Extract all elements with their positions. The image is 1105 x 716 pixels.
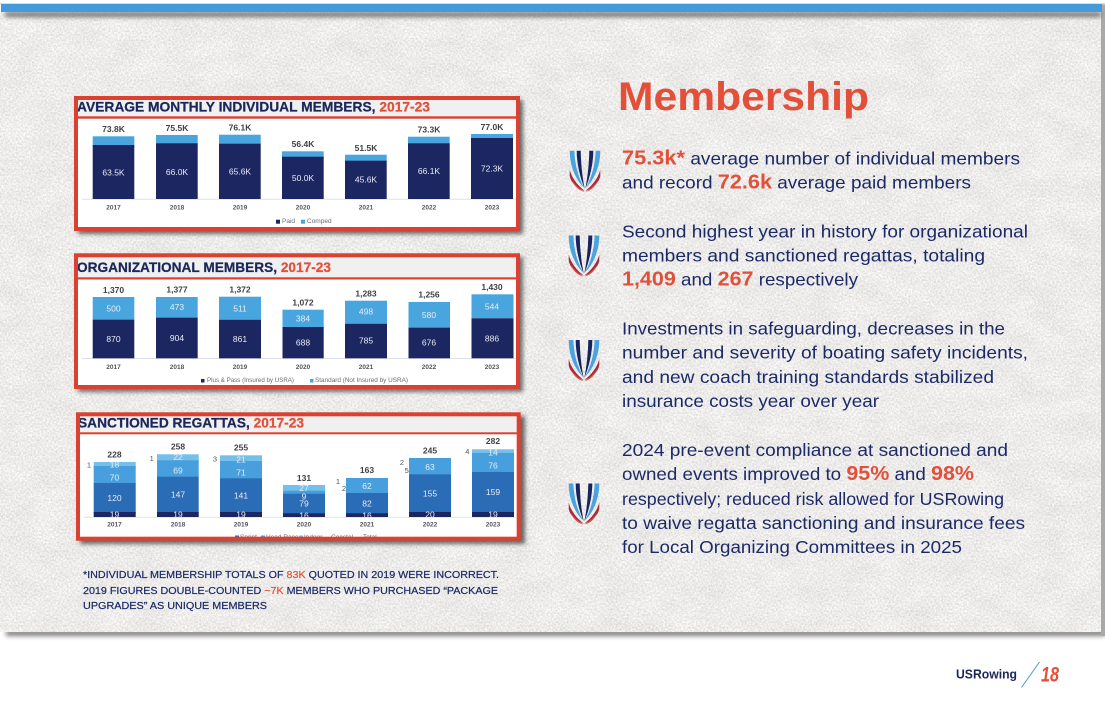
stacked bar chart: regattas: 2021 <box>360 522 375 528</box>
stacked bar chart: regattas <box>84 436 516 541</box>
bar chart: individual members: 76.1K <box>229 123 252 133</box>
bar chart: organizational members: 2020 <box>296 364 311 371</box>
stacked bar chart: regattas: 69 <box>173 466 183 476</box>
bar chart: individual members: 75.5K <box>166 123 189 133</box>
bar chart: organizational members: 870 <box>106 334 121 344</box>
bar chart: organizational members: 1,377 <box>166 285 188 295</box>
bar chart: organizational members: 785 <box>359 336 373 346</box>
bar chart: organizational members: 580 <box>422 310 436 320</box>
stacked bar chart: regattas: 70 <box>110 473 119 483</box>
text block: compliance: to waive regatta sanctioning and insurance fees <box>622 513 1025 533</box>
text block: compliance: owned events improved to 95% and 98% <box>622 463 974 485</box>
icon: oars 1 <box>570 151 600 192</box>
stacked bar chart: regattas: 82 <box>362 498 372 508</box>
text block: individual members <box>622 148 1020 194</box>
bar chart: organizational members <box>82 282 516 384</box>
legend: Sprint <box>240 534 257 541</box>
text block: compliance: respectively; reduced risk allowed for USRowing <box>622 489 1004 509</box>
bar chart: individual members: 2018 <box>170 204 185 212</box>
stacked bar chart: regattas: 20 <box>425 510 435 520</box>
bar chart: organizational members: 2023 <box>485 364 500 371</box>
bar chart: individual members: 66.1K <box>418 166 440 176</box>
bar chart: organizational members: 384 <box>296 314 310 324</box>
stacked bar chart: regattas: 2017 <box>107 522 122 528</box>
legend: Plus & Pass (Insured by USRA) <box>207 377 294 384</box>
stacked bar chart: regattas: 159 <box>486 487 500 497</box>
stacked bar chart: regattas: 228 <box>107 449 122 459</box>
stacked bar chart: regattas: 255 <box>234 443 248 453</box>
bar chart: individual members: 56.4K <box>292 139 315 149</box>
bar chart: individual members: 2019 <box>233 204 248 212</box>
footnote: *INDIVIDUAL MEMBERSHIP TOTALS OF 83K QUOTED IN 2019 WERE INCORRECT. <box>83 570 499 581</box>
stacked bar chart: regattas: 141 <box>234 491 248 501</box>
stacked bar chart: regattas: 19 <box>236 510 246 520</box>
bar chart: organizational members: 500 <box>106 303 121 313</box>
bar chart: individual members: 77.0K <box>481 122 504 132</box>
bar chart: organizational members: 1,372 <box>229 285 251 295</box>
bar chart: individual members <box>82 122 516 225</box>
icon: oars 4 <box>569 484 599 524</box>
stacked bar chart: regattas: 79 <box>299 499 309 509</box>
bar chart: individual members: 2017 <box>106 204 121 212</box>
stacked bar chart: regattas: 4 <box>465 447 469 456</box>
bar chart: organizational members: 904 <box>170 333 184 343</box>
stacked bar chart: regattas: 2020 <box>297 522 312 528</box>
bar chart: organizational members: 1,370 <box>103 285 124 295</box>
stacked bar chart: regattas: 9 <box>302 491 307 501</box>
text block: safeguarding: insurance costs year over year <box>622 391 879 411</box>
text block: organizational members: members and sanctioned regattas, totaling <box>622 246 985 266</box>
stacked bar chart: regattas: 2 <box>342 484 346 493</box>
stacked bar chart: regattas: 282 <box>486 436 500 446</box>
stacked bar chart: regattas: 21 <box>236 454 246 464</box>
legend <box>201 377 408 384</box>
stacked bar chart: regattas: 1 <box>336 477 340 486</box>
stacked bar chart: regattas: 76 <box>488 460 498 470</box>
text block: safeguarding: and new coach training standards stabilized <box>622 367 994 387</box>
bar chart: organizational members: 2021 <box>359 364 374 371</box>
text block: safeguarding <box>622 318 1028 411</box>
legend: Head Race <box>266 534 299 541</box>
heading: AVERAGE MONTHLY INDIVIDUAL MEMBERS, 2017-23 <box>77 98 430 114</box>
heading: ORGANIZATIONAL MEMBERS, 2017-23 <box>77 259 331 275</box>
bar chart: individual members: 45.6K <box>355 174 377 184</box>
stacked bar chart: regattas: 131 <box>297 473 311 483</box>
icon: oars 2 <box>569 236 599 276</box>
text block: compliance: 2024 pre-event compliance at sanctioned and <box>622 440 1008 460</box>
bar chart: individual members: 73.8K <box>102 124 126 134</box>
text block: compliance <box>622 440 1025 557</box>
stacked bar chart: regattas: 16 <box>362 510 372 520</box>
legend: Indoor <box>304 534 323 541</box>
bar chart: individual members: 2020 <box>296 204 311 212</box>
stacked bar chart: regattas: 71 <box>236 468 246 478</box>
stacked bar chart: regattas: 2018 <box>171 522 186 528</box>
text block: compliance: for Local Organizing Committees in 2025 <box>622 537 962 557</box>
text block: individual members: 75.3k* average number of individual members <box>622 148 1020 170</box>
bar chart: organizational members: 688 <box>296 338 310 348</box>
bar chart: organizational members: 1,430 <box>481 282 503 292</box>
text block: organizational members <box>622 222 1028 290</box>
bar chart: individual members: 50.0K <box>292 173 314 183</box>
stacked bar chart: regattas: 163 <box>360 465 374 475</box>
stacked bar chart: regattas: 258 <box>171 442 185 452</box>
panel: average monthly individual members <box>76 98 523 234</box>
bar chart: individual members: 66.0K <box>166 167 188 177</box>
bar chart: individual members: 65.6K <box>229 167 251 177</box>
stacked bar chart: regattas: 5 <box>405 466 409 475</box>
panel: sanctioned regattas <box>78 414 525 544</box>
stacked bar chart: regattas: 18 <box>110 459 119 469</box>
footnote: UPGRADES” AS UNIQUE MEMBERS <box>83 601 267 612</box>
bar chart: organizational members: 2022 <box>422 364 437 371</box>
bar chart: organizational members: 498 <box>359 307 373 317</box>
footnote: 2019 FIGURES DOUBLE-COUNTED ~7K MEMBERS WHO PURCHASED “PACKAGE <box>83 586 498 597</box>
bar chart: individual members: 63.5K <box>102 168 125 178</box>
bar chart: organizational members: 2017 <box>106 364 121 371</box>
panel: organizational members <box>76 255 523 392</box>
legend <box>235 534 376 537</box>
legend: Standard (Not Insured by USRA) <box>315 377 408 384</box>
footer brand <box>956 662 1059 688</box>
bar chart: individual members: 73.3K <box>418 125 441 135</box>
bar chart: individual members: 72.3K <box>481 164 503 174</box>
stacked bar chart: regattas: 19 <box>110 510 119 520</box>
stacked bar chart: regattas: 14 <box>488 448 498 458</box>
footer brand: USRowing <box>956 667 1017 682</box>
stacked bar chart: regattas: 2019 <box>234 522 249 528</box>
legend <box>276 218 332 225</box>
stacked bar chart: regattas: 16 <box>299 510 309 520</box>
bar chart: organizational members: 2019 <box>233 364 248 371</box>
bar chart: organizational members: 2018 <box>170 364 185 371</box>
bar chart: organizational members: 1,283 <box>355 289 377 299</box>
bar chart: organizational members: 861 <box>233 334 247 344</box>
bar chart: organizational members: 511 <box>233 303 247 313</box>
legend: Paid <box>282 218 295 225</box>
text block: safeguarding: number and severity of boating safety incidents, <box>622 342 1028 362</box>
bar chart: individual members: 2021 <box>359 204 374 212</box>
text block: individual members: and record 72.6k average paid members <box>622 172 971 194</box>
legend: Total <box>363 534 377 541</box>
bar chart: individual members: 51.5K <box>355 143 378 153</box>
bar chart: organizational members: 544 <box>485 301 499 311</box>
stacked bar chart: regattas: 1 <box>87 460 91 470</box>
footnote <box>83 570 499 612</box>
stacked bar chart: regattas: 3 <box>213 454 217 464</box>
stacked bar chart: regattas: 120 <box>107 493 122 503</box>
stacked bar chart: regattas: 2022 <box>423 522 438 528</box>
text block: organizational members: 1,409 and 267 respectively <box>622 268 858 290</box>
stacked bar chart: regattas: 245 <box>423 445 437 455</box>
stacked bar chart: regattas: 19 <box>173 510 183 520</box>
bar chart: individual members: 2023 <box>485 204 500 212</box>
stacked bar chart: regattas: 27 <box>299 483 309 493</box>
bar chart: individual members: 2022 <box>422 204 437 212</box>
stacked bar chart: regattas: 155 <box>423 488 437 498</box>
bar chart: organizational members: 1,256 <box>418 290 440 300</box>
stacked bar chart: regattas: 19 <box>488 510 498 520</box>
bar chart: organizational members: 886 <box>485 334 499 344</box>
title: Membership <box>618 75 869 119</box>
page number: 18 <box>1041 664 1059 686</box>
text block: organizational members: Second highest year in history for organizational <box>622 222 1028 242</box>
stacked bar chart: regattas: 22 <box>173 452 183 462</box>
stacked bar chart: regattas: 63 <box>425 462 435 472</box>
bar chart: organizational members: 1,072 <box>292 298 314 308</box>
bar chart: organizational members: 473 <box>170 302 184 312</box>
heading: SANCTIONED REGATTAS, 2017-23 <box>78 415 304 431</box>
stacked bar chart: regattas: 2023 <box>486 522 501 528</box>
text block: safeguarding: Investments in safeguarding, decreases in the <box>622 318 1005 338</box>
stacked bar chart: regattas: 147 <box>171 490 185 500</box>
stacked bar chart: regattas: 1 <box>150 454 154 463</box>
stacked bar chart: regattas: 2 <box>400 458 404 467</box>
stacked bar chart: regattas: 62 <box>362 481 372 491</box>
icon: oars 3 <box>569 340 599 381</box>
bar chart: organizational members: 676 <box>422 338 436 348</box>
legend: Coastal <box>331 534 354 541</box>
legend: Comped <box>307 218 332 225</box>
